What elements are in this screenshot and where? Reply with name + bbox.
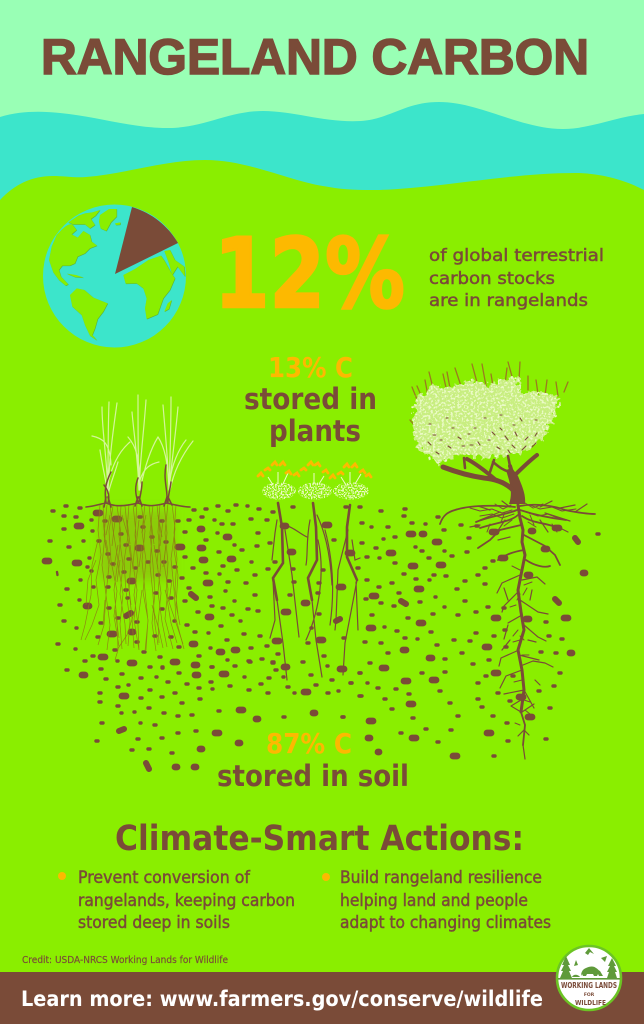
heading: carbon in soil (217, 727, 409, 793)
action 2: helping land and people (340, 891, 528, 910)
logo: Working Lands for Wildlife: FOR (584, 992, 595, 998)
soil carbon particles (45, 505, 599, 769)
carbon wedge (115, 207, 178, 274)
logo: Working Lands for Wildlife: WILDLIFE (575, 999, 606, 1007)
logo artwork (558, 948, 620, 980)
plant: tree crown (412, 376, 560, 463)
logo: Working Lands for Wildlife (557, 946, 621, 1010)
action 1: stored deep in soils (78, 913, 230, 932)
stat description: of global terrestrial (429, 246, 604, 266)
heading: climate-smart actions: Climate-Smart Actions: (115, 819, 524, 859)
plant: tree trunk and branches (443, 455, 537, 504)
heading: carbon in plants: stored in (244, 382, 377, 416)
heading: carbon in soil: stored in soil (217, 759, 409, 793)
logo text: WORKING LANDS (561, 981, 617, 990)
action 1 (58, 868, 295, 932)
action 2: Build rangeland resilience (340, 868, 542, 887)
crown speckle (428, 415, 537, 454)
action 1: rangelands, keeping carbon (78, 891, 295, 910)
title: RANGELAND CARBON (41, 29, 589, 85)
stat description: carbon stocks (429, 269, 555, 289)
action 1: Prevent conversion of (78, 868, 251, 887)
plant: forbs roots (270, 503, 360, 680)
stat description: are in rangelands (429, 291, 588, 311)
plant: grass roots (81, 503, 184, 660)
icon: globe with carbon wedge (43, 204, 186, 348)
heading: carbon in plants (244, 351, 377, 448)
footer link text: Learn more: www.farmers.gov/conserve/wildlife (21, 987, 543, 1011)
action 2 (322, 868, 551, 932)
plant: forbs foliage (262, 472, 369, 500)
plant: grass crown and shallow roots (86, 465, 190, 507)
forb stems (268, 472, 361, 485)
credit: Credit: USDA-NRCS Working Lands for Wildlife (22, 955, 228, 966)
heading: carbon in plants: plants (269, 414, 361, 448)
footer bar (0, 972, 644, 1024)
heading: carbon in soil: 87% C (266, 727, 352, 760)
stat: 12 percent: 12% (214, 218, 405, 330)
action 2: adapt to changing climates (340, 913, 551, 932)
plant: tree twigs (410, 362, 568, 432)
globe continents (49, 209, 185, 340)
stat description (429, 246, 604, 311)
background: teal wave (0, 102, 644, 260)
plant: tree roots (440, 501, 595, 759)
heading: carbon in plants: 13% C (268, 351, 353, 384)
plant: grass leaves (92, 395, 193, 495)
plant: forbs orange flowers (258, 462, 371, 478)
